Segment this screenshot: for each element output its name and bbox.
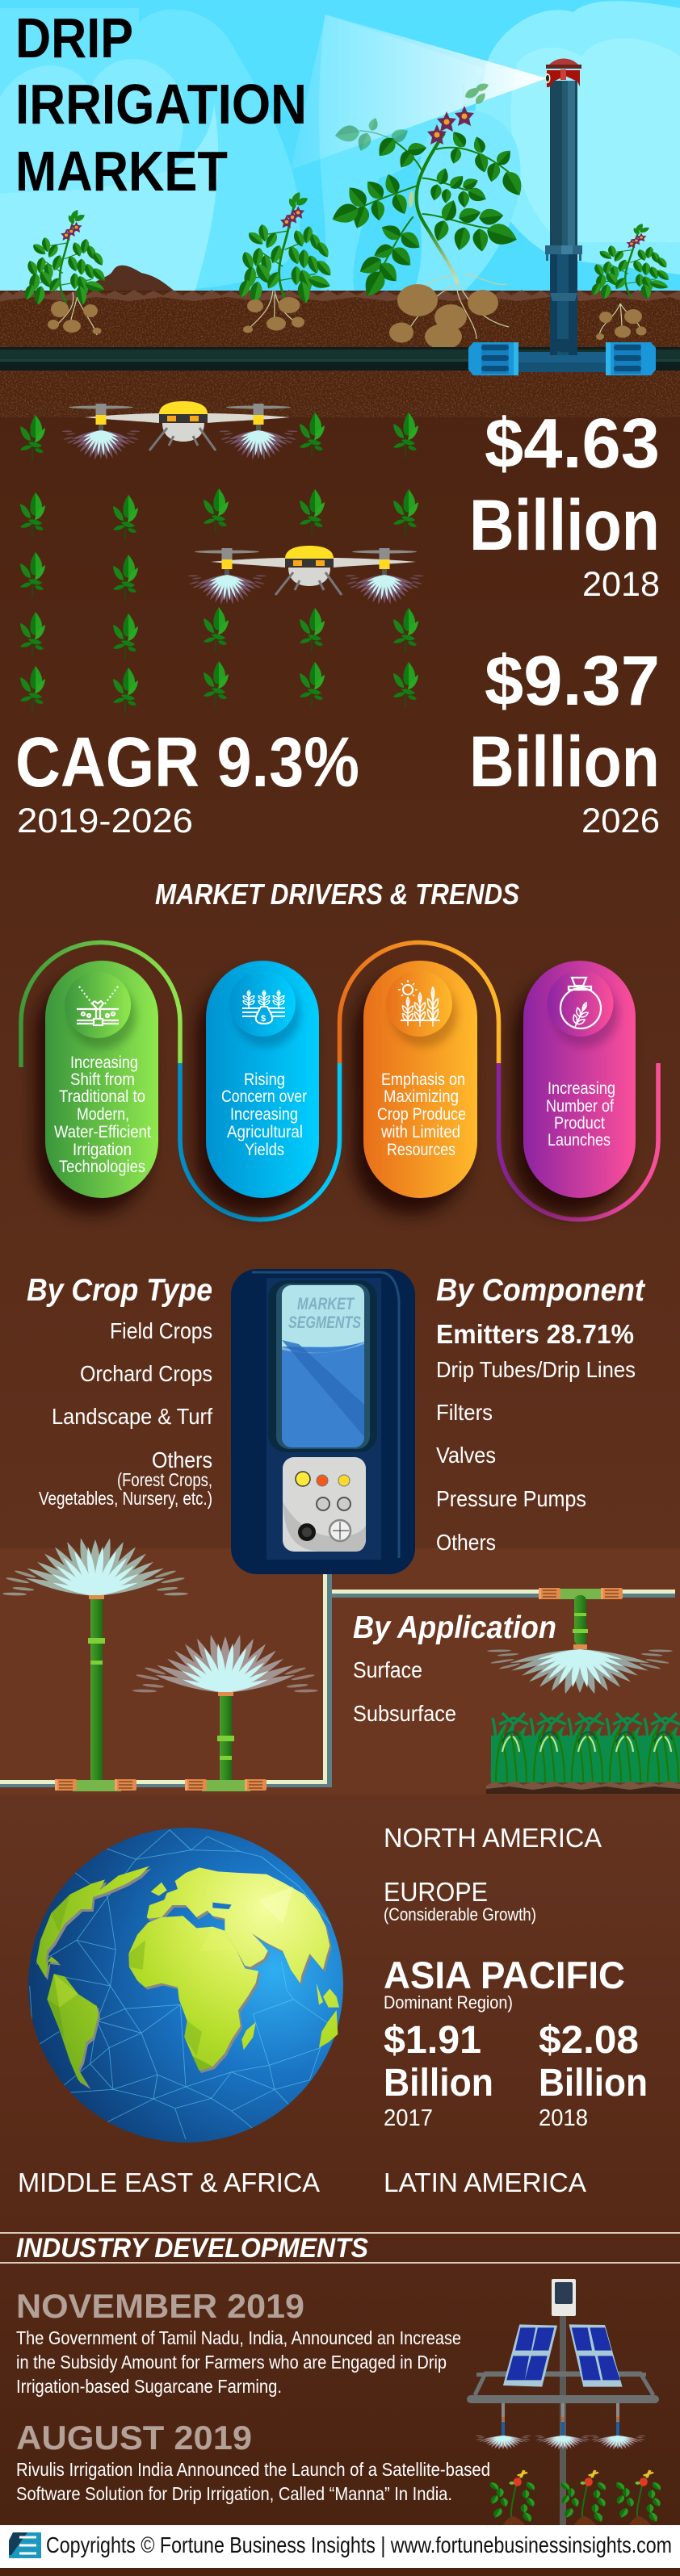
icon: crops and money bag: $ <box>261 1014 266 1024</box>
text block: November 2019 <box>16 2287 461 2397</box>
connector arcs <box>21 943 658 1220</box>
segment list: crop type: By Crop Type <box>27 1273 212 1308</box>
solar panels <box>503 2324 623 2387</box>
panel: driver 2: Increasing <box>230 1105 298 1124</box>
panel: driver 2: Rising <box>244 1070 285 1089</box>
pipe network <box>0 1570 675 1787</box>
panel: driver 3: Crop Produce <box>377 1105 466 1124</box>
heading: market drivers: MARKET DRIVERS & TRENDS <box>155 878 519 911</box>
segment list: application: Subsurface <box>353 1701 456 1726</box>
panel: driver 1: Shift from <box>70 1070 135 1089</box>
region: Asia Pacific: Dominant Region) <box>384 1992 513 2013</box>
region: Asia Pacific: $2.08 <box>539 2019 639 2062</box>
segment list: component: Drip Tubes/Drip Lines <box>436 1357 636 1382</box>
land facets <box>47 1887 293 2071</box>
sprinkler riser <box>545 81 582 355</box>
panel: driver 1: Technologies <box>59 1158 145 1176</box>
mound <box>85 266 176 292</box>
panel: driver 1: Increasing <box>70 1053 138 1072</box>
panel: driver 4: Increasing <box>548 1079 615 1098</box>
segment list: application: Surface <box>353 1657 422 1682</box>
region labels: MIDDLE EAST & AFRICA <box>18 2168 320 2197</box>
segment list: component: Pressure Pumps <box>436 1486 586 1511</box>
background: sprinkler band <box>0 1548 680 1795</box>
region labels: LATIN AMERICA <box>384 2168 586 2197</box>
tomato plants <box>488 2470 663 2526</box>
segment list: crop type: Orchard Crops <box>80 1361 212 1386</box>
stat: 2026 market size: $9.37 <box>485 642 660 720</box>
device screen: MARKET <box>297 1295 355 1313</box>
device screen: SEGMENTS <box>288 1313 361 1332</box>
background: lower brown <box>0 1794 680 2576</box>
panel: driver 2 <box>196 961 319 1214</box>
sprinkler: hanging right <box>487 1588 673 1694</box>
region: Asia Pacific: $1.91 <box>384 2019 481 2062</box>
plant flowers <box>427 106 474 145</box>
panel: driver 1: Irrigation <box>73 1141 132 1159</box>
device screen <box>282 1285 364 1447</box>
plant D <box>590 223 672 299</box>
title <box>15 6 307 203</box>
region labels: (Considerable Growth) <box>384 1904 536 1925</box>
segment list: component: Emitters 28.71% <box>436 1319 634 1349</box>
segment list: crop type: Field Crops <box>110 1318 212 1343</box>
panel: drones over seedlings <box>20 401 423 713</box>
panel: market segments device <box>231 1269 415 1574</box>
plant A <box>23 208 108 305</box>
soil crest <box>0 290 680 301</box>
segment list: crop type <box>27 1273 212 1509</box>
region labels: NORTH AMERICA <box>384 1823 602 1853</box>
sprinkler: tall left <box>2 1538 188 1784</box>
plant top sprig <box>464 82 489 106</box>
text block: November 2019: in the Subsidy Amount for Farmers who are Engaged in Drip <box>16 2352 447 2373</box>
solar frame <box>467 2373 659 2403</box>
soil <box>0 291 680 404</box>
text block: August 2019: Rivulis Irrigation India Announced the Launch of a Satellite-based <box>16 2459 490 2480</box>
panel: driver 3: Resources <box>387 1141 455 1159</box>
region: Asia Pacific: ASIA PACIFIC <box>384 1954 625 1996</box>
region: Asia Pacific: Billion <box>384 2062 493 2105</box>
panel: driver 2: Yields <box>245 1141 284 1159</box>
icon: crops and money bag <box>242 991 285 1024</box>
illustration: solar irrigation pole <box>467 2279 663 2526</box>
clouds <box>0 1 680 295</box>
globe continents <box>36 1866 339 2087</box>
footer <box>0 2525 680 2576</box>
stat: 2018 market size <box>469 404 660 604</box>
text block: August 2019: AUGUST 2019 <box>16 2419 252 2457</box>
drone 2 <box>188 546 423 605</box>
stat: CAGR: CAGR 9.3% <box>15 723 359 802</box>
panel: driver 2: Concern over <box>221 1087 307 1106</box>
panel: driver 1 <box>36 961 158 1214</box>
panel: driver 4: Product <box>554 1114 605 1133</box>
panel: driver 3: Maximizing <box>384 1087 459 1106</box>
segment list: crop type: Landscape & Turf <box>52 1404 212 1429</box>
text block: August 2019: Software Solution for Drip Irrigation, Called “Manna” In India. <box>16 2483 452 2504</box>
sprinkler: short left <box>132 1635 318 1784</box>
text block: November 2019: The Government of Tamil Nadu, India, Announced an Increase <box>16 2327 461 2348</box>
stat: 2026 market size <box>469 642 660 840</box>
region: Asia Pacific: 2017 <box>384 2105 433 2131</box>
segment list: component: Others <box>436 1530 496 1555</box>
panel: driver 1: Traditional to <box>59 1087 145 1106</box>
stat: 2018 market size: 2018 <box>582 565 660 604</box>
bottom pipe fittings <box>55 1779 267 1791</box>
panel: driver 1: Water-Efficient <box>54 1123 151 1141</box>
stat: CAGR <box>15 723 359 840</box>
background: brown page <box>0 371 680 1549</box>
segment list: component <box>436 1273 646 1555</box>
irrigation nozzles <box>475 2403 646 2450</box>
text block: November 2019: NOVEMBER 2019 <box>16 2287 304 2325</box>
big potato plant <box>329 116 527 300</box>
panel: driver 3: Emphasis on <box>381 1070 465 1089</box>
main water pipe <box>0 347 680 372</box>
region: Asia Pacific: 2018 <box>539 2105 588 2131</box>
segment list: component: By Component <box>436 1273 646 1308</box>
segment list: crop type: Vegetables, Nursery, etc.) <box>39 1488 212 1509</box>
segment list: application <box>353 1611 556 1726</box>
sky <box>0 0 680 295</box>
globe <box>28 1828 343 2142</box>
icon: sun and wheat <box>398 980 440 1027</box>
icon: seed sack <box>560 978 601 1031</box>
device control panel <box>283 1457 366 1552</box>
panel: driver 3: with Limited <box>380 1123 460 1141</box>
globe mesh <box>30 1830 342 2139</box>
sprinkler head <box>544 58 581 87</box>
stat: 2026 market size: 2026 <box>581 802 660 840</box>
panel: driver 4: Launches <box>548 1131 611 1150</box>
stat: CAGR: 2019-2026 <box>17 802 193 840</box>
title: MARKET <box>15 140 228 203</box>
segment list: crop type: (Forest Crops, <box>117 1469 212 1490</box>
spray beam <box>291 15 547 170</box>
segment list: component: Filters <box>436 1400 493 1425</box>
black sea <box>212 1903 232 1909</box>
title: IRRIGATION <box>15 73 307 136</box>
segment list: component: Valves <box>436 1443 496 1468</box>
plant B <box>237 191 334 304</box>
region: Asia Pacific <box>384 1954 648 2131</box>
drone 1 <box>62 401 297 460</box>
region labels <box>18 1823 602 2197</box>
soil texture <box>0 292 680 417</box>
panel: driver 1: Modern, <box>77 1105 129 1124</box>
text block: November 2019: Irrigation-based Sugarcane Farming. <box>16 2376 282 2397</box>
heading: industry developments: INDUSTRY DEVELOPMENTS <box>16 2233 368 2264</box>
panel: driver 4: Number of <box>546 1097 614 1116</box>
potatoes and roots <box>48 274 646 350</box>
icon: logo <box>9 2532 41 2558</box>
text block: August 2019 <box>16 2419 490 2504</box>
icon: sprinkler <box>77 986 119 1025</box>
title: DRIP <box>15 6 133 69</box>
crop rows <box>486 1713 680 1794</box>
panel: hero farm scene <box>0 0 680 417</box>
blue couplers <box>468 342 656 375</box>
panel: driver 3 <box>354 961 477 1214</box>
panel: driver 2: Agricultural <box>227 1123 303 1141</box>
panel: driver 4 <box>514 961 636 1214</box>
segment list: application: By Application <box>353 1611 556 1645</box>
stat: 2018 market size: $4.63 <box>485 404 660 483</box>
region: Asia Pacific: Billion <box>539 2062 648 2105</box>
region labels: EUROPE <box>384 1877 488 1907</box>
globe continents shadow <box>38 1869 332 2089</box>
segment list: crop type: Others <box>152 1447 212 1472</box>
seedling grid <box>20 413 418 713</box>
